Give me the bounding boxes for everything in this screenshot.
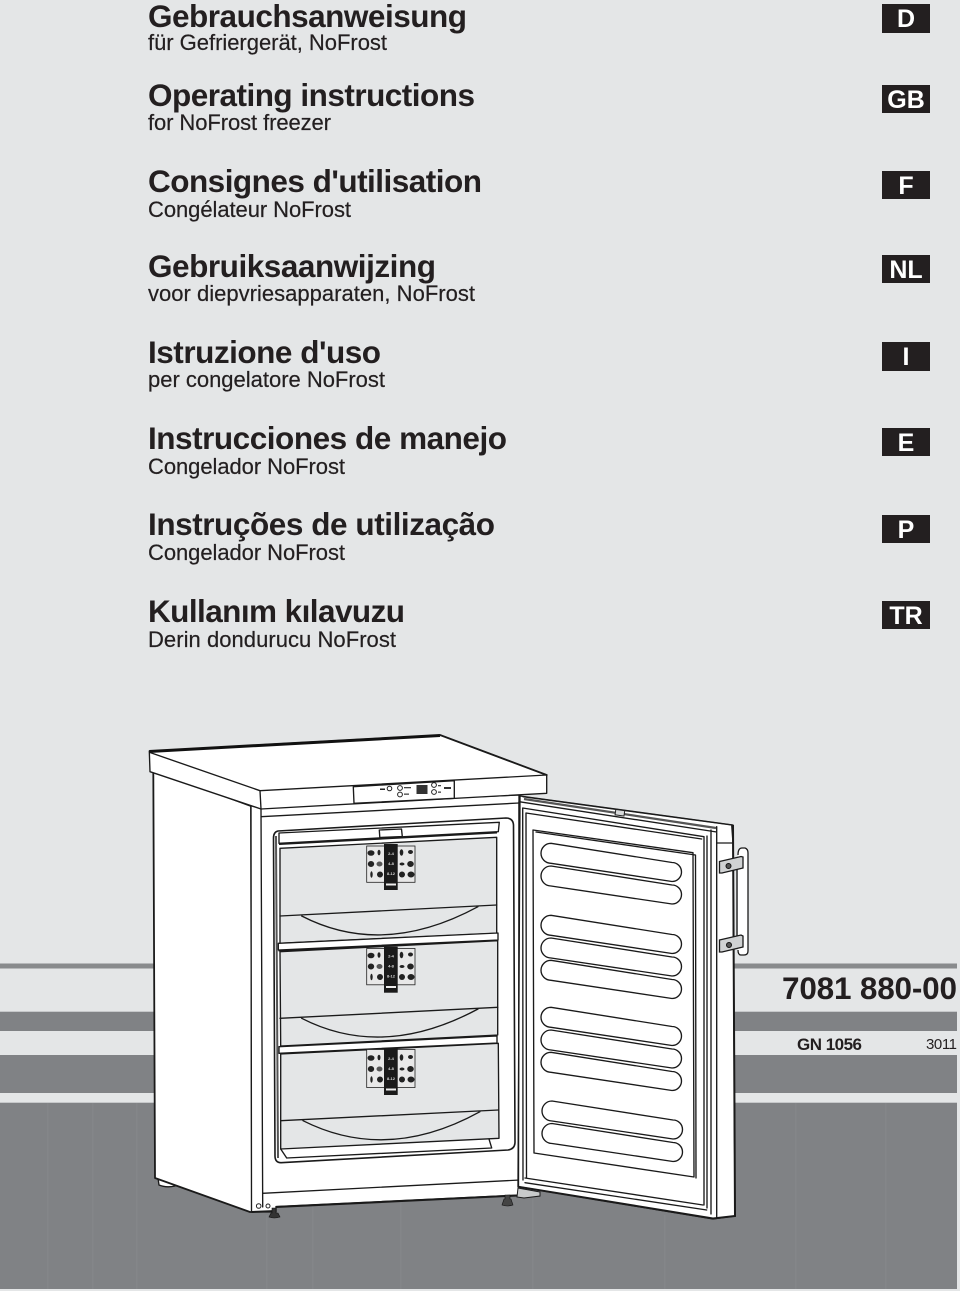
- heading: French: Consignes d'utilisation: [148, 163, 482, 199]
- worktop: [149, 735, 547, 809]
- print code: 3011: [926, 1036, 957, 1053]
- drawer label 1: 8-12: [387, 871, 396, 876]
- drawer 2: [279, 941, 498, 1053]
- drawer label 3: 2-4: [388, 1056, 395, 1061]
- drawer label 2: 2-4: [388, 954, 395, 958]
- freezer illustration: [149, 735, 748, 1219]
- door hinge: [517, 1188, 540, 1198]
- icon: front feet and screws: [256, 1195, 513, 1218]
- drawer label 1: 2-4: [388, 851, 395, 856]
- heading: Portuguese: Instruções de utilização: [148, 506, 495, 542]
- badge E: [882, 428, 930, 457]
- drawer label 3: [367, 1048, 415, 1095]
- heading: Italian: Istruzione d'uso: [148, 334, 381, 370]
- badge P: P: [898, 516, 914, 544]
- drawer label 2: [367, 947, 415, 993]
- badge F: [882, 171, 930, 200]
- heading: Spanish: Instrucciones de manejo: [148, 420, 507, 456]
- drawer label 2: 8-12: [387, 974, 396, 978]
- heading: English: [148, 77, 475, 135]
- language titles: [148, 0, 507, 652]
- freezer front frame: [251, 795, 520, 1212]
- badge D: D: [897, 5, 915, 33]
- badge D: [882, 4, 930, 33]
- drawer label 2: 4-8: [388, 964, 395, 968]
- badge TR: TR: [889, 602, 923, 630]
- heading: Spanish: Congelador NoFrost: [148, 454, 345, 479]
- heading: Turkish: Derin dondurucu NoFrost: [148, 627, 396, 652]
- badge I: I: [903, 343, 909, 371]
- heading: Portuguese: Congelador NoFrost: [148, 540, 345, 565]
- document number: 7081 880-00: [782, 970, 957, 1006]
- heading: German: für Gefriergerät, NoFrost: [148, 30, 387, 55]
- drawer label 1: [367, 844, 415, 890]
- door top catch: [615, 809, 625, 816]
- heading: English: Operating instructions: [148, 77, 475, 113]
- badge NL: NL: [889, 256, 923, 284]
- heading: Turkish: Kullanım kılavuzu: [148, 593, 405, 629]
- heading: Dutch: [148, 248, 475, 306]
- badge F: F: [898, 172, 914, 200]
- door handle: [720, 848, 748, 955]
- background bands: [0, 964, 957, 1289]
- door: [518, 796, 735, 1219]
- heading: French: Congélateur NoFrost: [148, 197, 351, 222]
- badge E: E: [898, 429, 914, 457]
- model number: GN 1056: [797, 1035, 862, 1054]
- heading: Dutch: voor diepvriesapparaten, NoFrost: [148, 281, 475, 306]
- badge P: [882, 515, 930, 544]
- badge TR: [882, 601, 930, 630]
- drawer 1: [278, 832, 498, 950]
- freezer side panel: [153, 770, 252, 1212]
- heading: Spanish: [148, 420, 507, 479]
- heading: Italian: [148, 334, 385, 392]
- drawer 3: [281, 1043, 499, 1158]
- drawer label 1: 4-8: [388, 861, 395, 866]
- drawer label 3: 8-12: [387, 1076, 396, 1081]
- control panel: [353, 781, 454, 803]
- heading: French: [148, 163, 482, 222]
- interior opening: [274, 818, 515, 1163]
- language badges: [882, 4, 930, 630]
- heading: Italian: per congelatore NoFrost: [148, 367, 385, 392]
- door rails: [541, 843, 682, 1162]
- drawer label 3: 4-8: [388, 1066, 395, 1071]
- icon: rear foot: [158, 1178, 176, 1187]
- heading: English: for NoFrost freezer: [148, 110, 331, 135]
- heading: German: [148, 0, 467, 55]
- top drawer rim: [279, 822, 499, 843]
- badge GB: GB: [887, 86, 925, 114]
- heading: Turkish: [148, 593, 405, 652]
- badge I: [882, 342, 930, 371]
- badge NL: [882, 255, 930, 284]
- heading: Dutch: Gebruiksaanwijzing: [148, 248, 436, 284]
- heading: Portuguese: [148, 506, 495, 565]
